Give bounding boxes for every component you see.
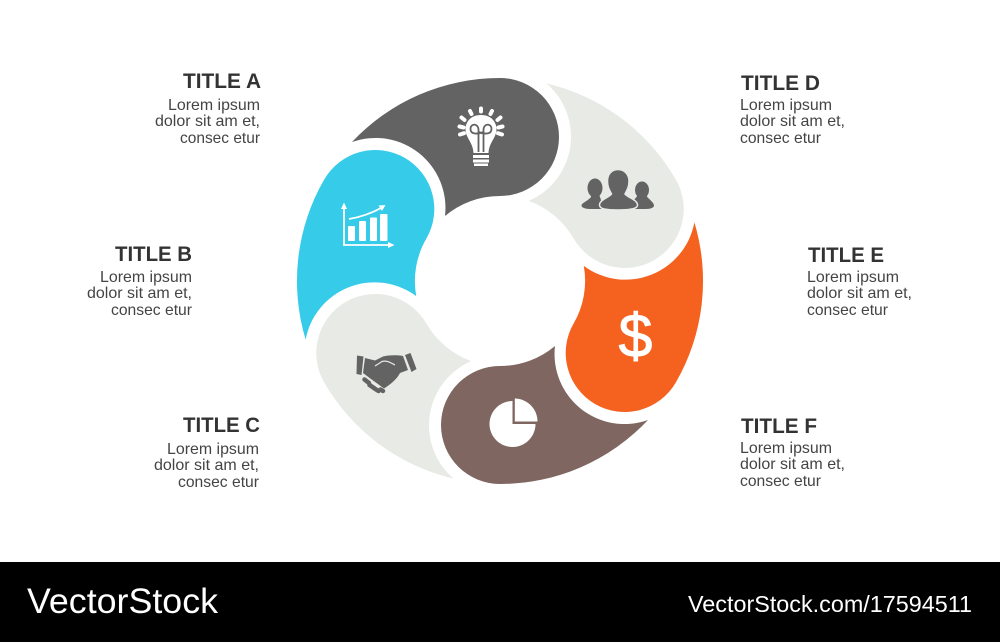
text block: Title E [807, 244, 912, 319]
footer logo text: VectorStock [27, 582, 219, 621]
footer image id: VectorStock.com/17594511 [688, 591, 972, 617]
text block: Title A [155, 70, 261, 147]
text block: Title B: dolor sit am et, [87, 285, 192, 302]
text block: Title B: Lorem ipsum [100, 269, 192, 286]
text block: Title D [740, 72, 845, 147]
icon: bar chart [341, 202, 394, 248]
icon: pie chart [490, 398, 538, 447]
segment C: light gray [295, 262, 518, 511]
text block: Title F: consec etur [740, 473, 822, 490]
text block: Title D: Lorem ipsum [740, 97, 832, 114]
text block: Title B: TITLE B [115, 243, 192, 266]
text block: Title D: consec etur [740, 130, 822, 147]
text block: Title C [154, 414, 260, 491]
text block: Title C: TITLE C [183, 414, 260, 437]
segment E: orange [527, 185, 750, 434]
text block: Title A: consec etur [180, 130, 261, 147]
text block: Title E: TITLE E [808, 244, 884, 267]
text block: Title B: consec etur [111, 302, 193, 319]
segment B: blue [250, 128, 473, 377]
text block: Title A: Lorem ipsum [168, 97, 260, 114]
segment A: dark gray [352, 78, 559, 216]
text block: Title C: dolor sit am et, [154, 457, 259, 474]
text block: Title F: TITLE F [741, 415, 817, 438]
text block: Title F: Lorem ipsum [740, 440, 832, 457]
text block: Title E: consec etur [807, 302, 889, 319]
segment D: light gray [482, 51, 705, 300]
text block: Title B [87, 243, 193, 319]
footer band [0, 562, 1000, 642]
text block: Title D: TITLE D [741, 72, 820, 95]
text block: Title A: TITLE A [183, 70, 261, 93]
icon: group of people [582, 170, 654, 210]
text block: Title F: dolor sit am et, [740, 456, 845, 473]
text block: Title A: dolor sit am et, [155, 113, 260, 130]
text block: Title E: Lorem ipsum [807, 269, 899, 286]
icon: dollar sign: $ [619, 302, 652, 370]
text block: Title E: dolor sit am et, [807, 285, 912, 302]
text block: Title F [740, 415, 845, 490]
text block: Title C: Lorem ipsum [167, 441, 259, 458]
text block: Title C: consec etur [178, 474, 260, 491]
icon: handshake [356, 353, 416, 391]
segment F: brown [441, 346, 648, 484]
text block: Title D: dolor sit am et, [740, 113, 845, 130]
icon: light bulb [460, 108, 502, 166]
